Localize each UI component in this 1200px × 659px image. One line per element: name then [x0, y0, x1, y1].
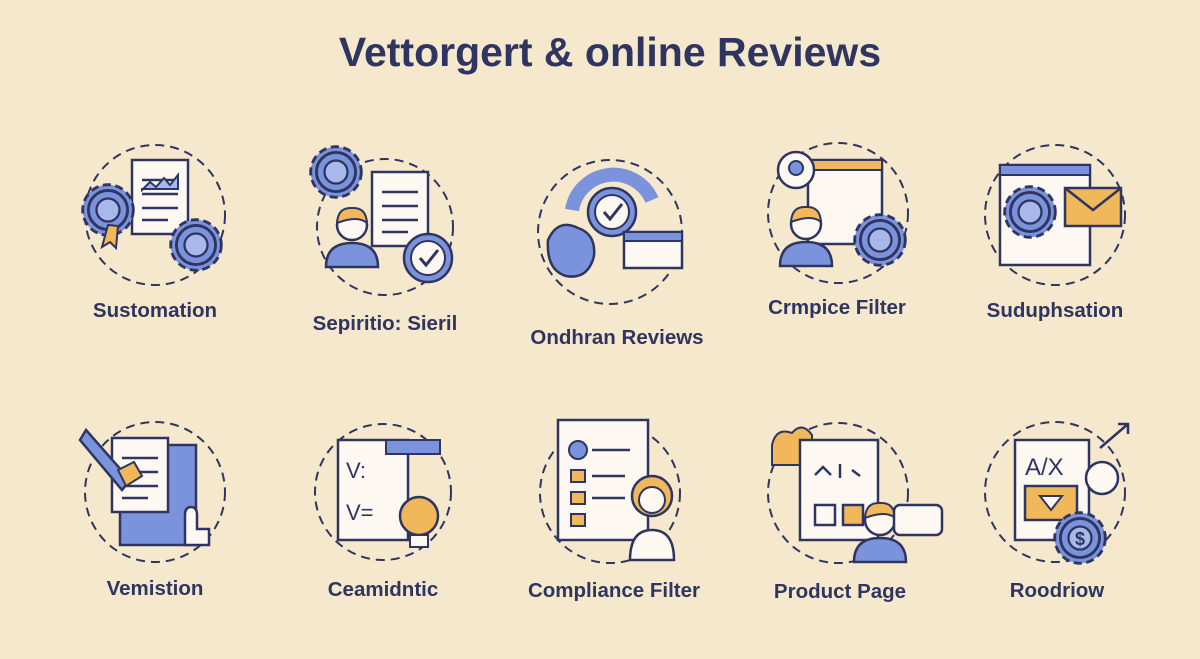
panel: Ceamidntic: V=	[346, 500, 374, 525]
panel: Ondhran Reviews: Ondhran Reviews	[530, 326, 704, 349]
panel: Vemistion	[80, 422, 225, 600]
panel: Product Page	[768, 423, 942, 603]
panel: Vemistion: Vemistion	[107, 577, 203, 600]
panel: Ceamidntic	[315, 424, 451, 601]
panel: Ceamidntic: Ceamidntic	[328, 578, 438, 601]
panel: Ceamidntic: V:	[346, 458, 366, 483]
panel: Sepiritio Sieril: Sepiritio: Sieril	[313, 312, 457, 335]
panel: Sustomation: Sustomation	[93, 299, 217, 322]
panel: Sustomation	[83, 145, 225, 322]
panel: Roodriow: Roodriow	[1010, 579, 1104, 602]
panel: Product Page: Product Page	[774, 580, 906, 603]
panel: Roodriow: $	[1075, 529, 1085, 549]
panel: Compliance Filter: Compliance Filter	[528, 579, 700, 602]
panel: Crmpice Filter	[768, 143, 908, 319]
panel: Ondhran Reviews	[530, 160, 704, 349]
panel: Compliance Filter	[528, 420, 700, 602]
panel: Roodriow: A/X	[1025, 454, 1064, 481]
title: Vettorgert & online Reviews	[339, 29, 881, 75]
panel: Suduphsation	[985, 145, 1125, 322]
panel: Roodriow	[985, 422, 1128, 602]
panel: Sepiritio Sieril	[311, 147, 457, 335]
panel: Crmpice Filter: Crmpice Filter	[768, 296, 906, 319]
panel: Suduphsation: Suduphsation	[987, 299, 1123, 322]
